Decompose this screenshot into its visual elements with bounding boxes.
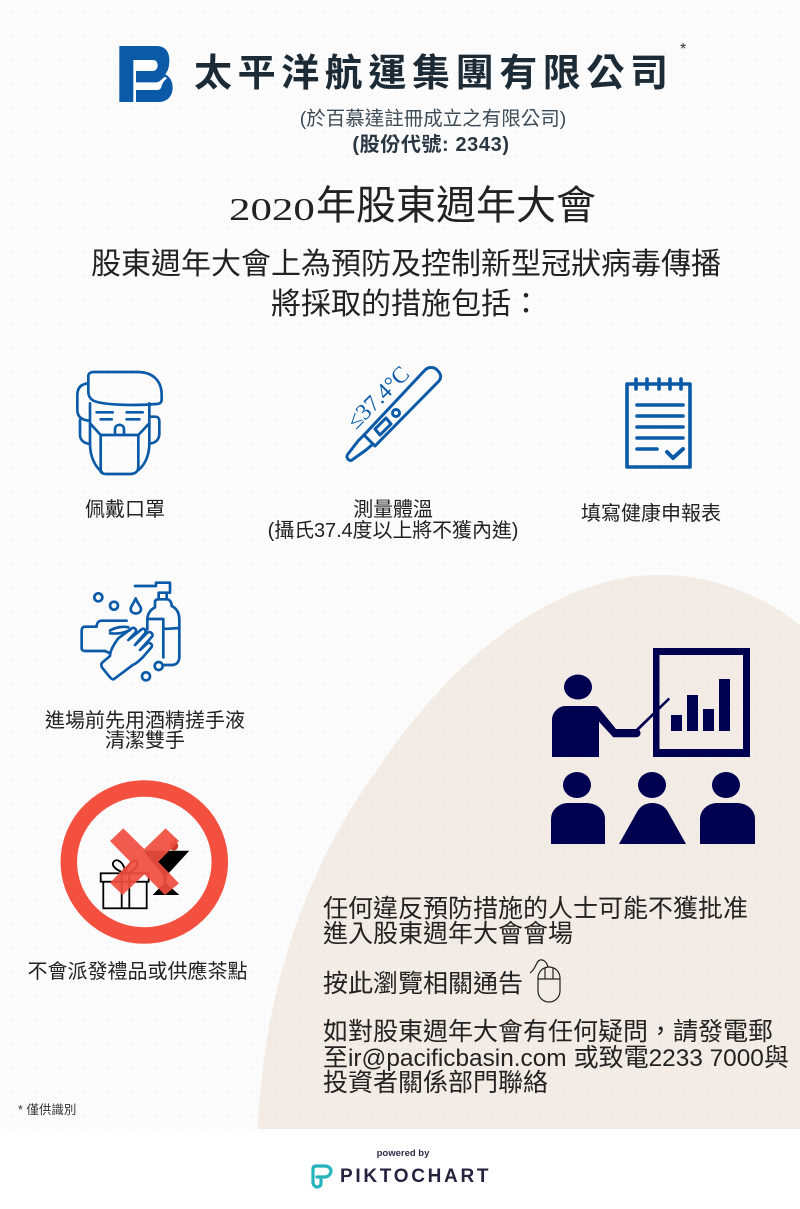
icon: thermometer [342,361,442,462]
registration note: (於百慕達註冊成立之有限公司) [300,108,566,130]
sanitiser label: 進場前先用酒精搓手液 [45,710,245,732]
company name: 太平洋航運集團有限公司 [194,53,674,95]
sanitiser label: 清潔雙手 [105,730,185,752]
main heading: 2020 [229,191,315,227]
notice text: 任何違反預防措施的人士可能不獲批准 [323,894,748,922]
footer: piktochart logo [311,1164,333,1189]
footer: powered by: powered by [377,1148,429,1159]
main heading: 年股東週年大會 [316,184,596,228]
notice text: 進入股東週年大會會場 [323,920,573,948]
subheading: 股東週年大會上為預防及控制新型冠狀病毒傳播 [91,248,721,281]
icon: washing hands [80,581,181,682]
contact text: 如對股東週年大會有任何疑問，請發電郵 [323,1018,773,1046]
background blob [258,575,800,1129]
contact text: 至ir@pacificbasin.com 或致電2233 7000與 [323,1044,789,1072]
icon: presentation [551,648,755,844]
footnote: * 僅供識別 [18,1103,76,1117]
form label: 填寫健康申報表 [581,503,721,525]
thermometer label: 測量體溫 [353,499,433,521]
contact text [323,1018,789,1097]
no gifts label: 不會派發禮品或供應茶點 [28,961,248,983]
notice text [323,894,748,948]
logo [119,46,173,102]
stock code: (股份代號: 2343) [352,134,510,156]
footer: piktochart wordmark: PIKTOCHART [340,1166,491,1187]
thermometer label [268,499,518,542]
link text: 按此瀏覽相關通告 [323,970,523,998]
icon: face mask [76,370,163,476]
subheading: 將採取的措施包括： [271,288,541,321]
icon: mouse [530,959,561,1003]
icon: health form [625,377,692,469]
subheading [91,248,721,321]
mask label: 佩戴口罩 [85,499,165,521]
asterisk: * [680,41,686,58]
sanitiser label [45,710,245,752]
contact text: 投資者關係部門聯絡 [323,1069,548,1097]
icon: thermometer: ≤37.4°C [342,361,414,434]
thermometer label: (攝氏37.4度以上將不獲內進) [268,520,518,542]
icon: no gifts or refreshments [60,780,228,944]
